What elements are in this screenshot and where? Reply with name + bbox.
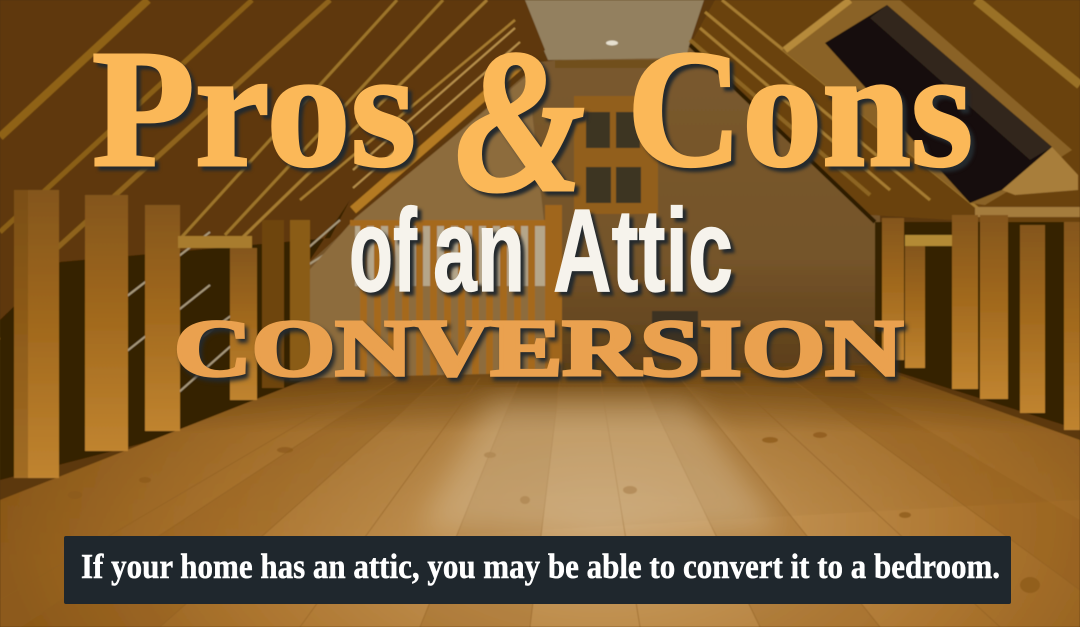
subtitle: of an Attic: of <box>349 185 417 317</box>
subtitle: of an Attic: an <box>433 185 525 317</box>
back wall <box>310 45 880 400</box>
floor <box>0 365 1080 627</box>
left studs <box>14 190 59 478</box>
stair railing <box>350 220 545 226</box>
caption bar <box>64 536 1011 604</box>
title: Pros & Cons: Pros <box>92 16 416 202</box>
ceiling <box>522 0 704 60</box>
title: Pros & Cons: & <box>455 8 585 235</box>
ceiling lamp <box>606 40 618 46</box>
light pool on floor <box>420 400 780 530</box>
title: Pros & Cons <box>92 8 973 235</box>
left rafter slope <box>0 0 545 480</box>
subtitle: of an Attic <box>349 185 733 317</box>
right rafter slope <box>690 0 1080 235</box>
dark bay below left rafters <box>0 200 350 480</box>
skylight <box>782 0 1072 205</box>
bucket <box>652 311 698 356</box>
title: Conversion: CONVERSION <box>174 305 903 393</box>
window <box>574 96 658 214</box>
right studs <box>1064 222 1080 430</box>
left inner wall <box>305 75 545 380</box>
title: Pros & Cons: Cons <box>627 16 973 202</box>
dark bay below right rafters <box>875 222 1080 430</box>
subtitle: of an Attic: Attic <box>553 185 733 317</box>
